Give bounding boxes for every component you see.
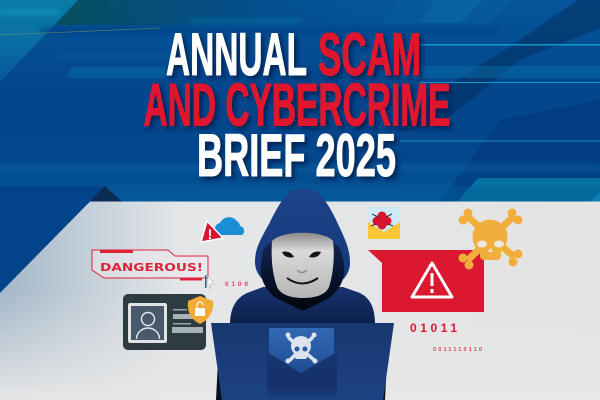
hood <box>255 188 350 313</box>
callout: dangerous label: DANGEROUS! <box>100 261 203 274</box>
title: BRIEF 2025 <box>197 122 396 189</box>
hacker body <box>230 287 375 325</box>
binary text large: 01011 <box>410 321 457 335</box>
icon: orange skull and crossbones <box>458 208 522 270</box>
background: light grey floor <box>0 186 600 400</box>
icon: mouse cursor <box>205 275 214 289</box>
laptop lid <box>211 323 394 400</box>
hood opening <box>261 237 344 311</box>
mask face <box>272 233 334 298</box>
icon: blue cloud <box>215 217 244 235</box>
icon: red warning triangle: ! <box>208 226 212 242</box>
hacker figure <box>211 188 394 400</box>
panel: red alert speech box <box>368 250 484 312</box>
icon: red warning triangle <box>201 221 223 242</box>
binary text left: 0100 <box>225 281 248 288</box>
icon: identity card <box>123 294 206 350</box>
title: ANNUAL <box>166 21 307 88</box>
laptop skull panel <box>269 328 334 374</box>
binary text small: 0011110110 <box>433 347 482 353</box>
icon: white warning triangle <box>412 263 452 297</box>
title: SCAM <box>318 21 421 88</box>
title <box>144 21 450 189</box>
laptop envelope flap <box>267 352 337 400</box>
laptop edges <box>216 360 387 400</box>
icon: orange shield with padlock <box>188 296 213 324</box>
background: blue tech banner <box>0 0 600 204</box>
callout: dangerous label <box>92 250 208 280</box>
icon: envelope with bug <box>368 207 400 239</box>
icon: white skull and crossbones <box>286 332 318 364</box>
